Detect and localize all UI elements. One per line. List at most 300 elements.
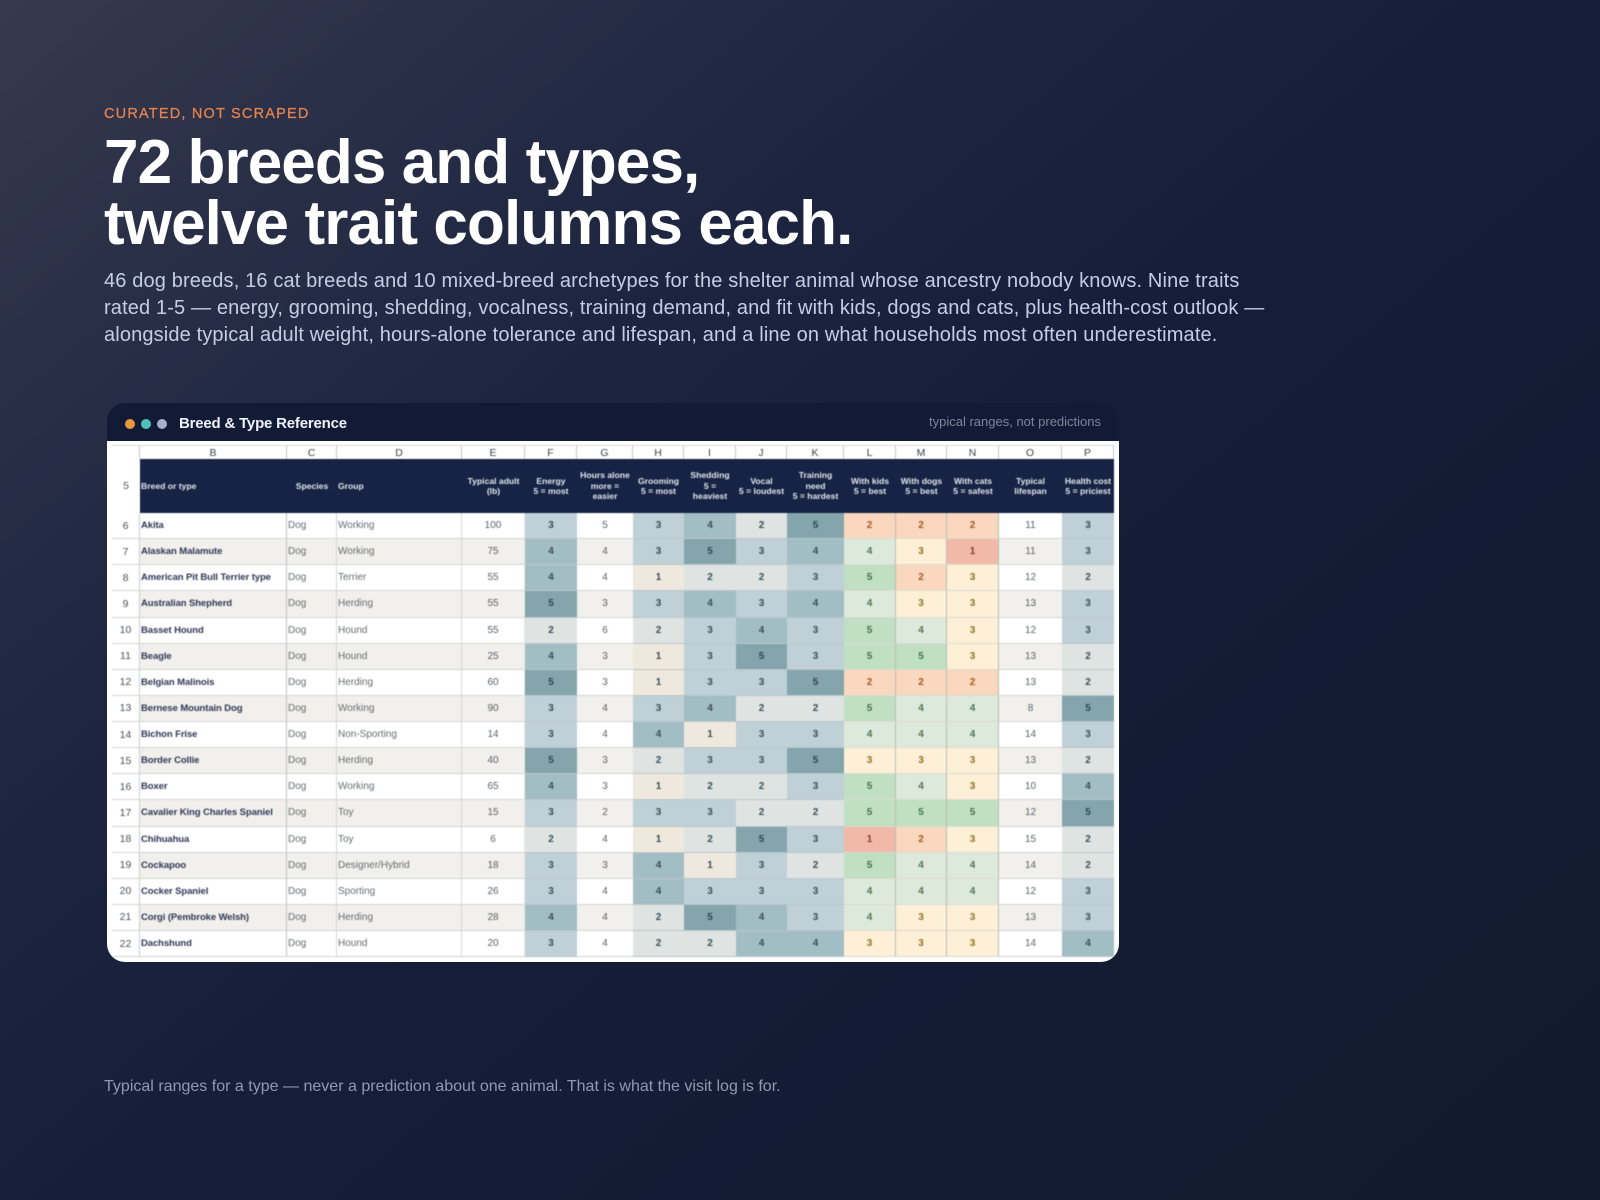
row: Cocker Spaniel: 3: [548, 886, 554, 897]
row: Basset Hound: 5: [867, 625, 872, 636]
header row: Typical adult: [468, 476, 519, 486]
row: Cavalier King Charles Spaniel: 5: [970, 807, 975, 818]
row: Belgian Malinois: Belgian Malinois: [141, 677, 214, 688]
footnote: Typical ranges for a type — never a prediction about one animal. That is what the visit log is for.: [104, 1078, 781, 1094]
row: Cockapoo: 14: [1025, 860, 1036, 871]
row: Australian Shepherd: 4: [867, 598, 872, 609]
row: Bichon Frise: 4: [918, 729, 924, 740]
row: Chihuahua: 15: [1025, 834, 1036, 845]
row: American Pit Bull Terrier type: 2: [1085, 572, 1091, 583]
header row: more =: [591, 481, 619, 491]
row: Dachshund: 3: [867, 938, 872, 949]
header row: Vocal: [750, 476, 773, 486]
row: Chihuahua: 3: [813, 834, 818, 845]
row: Chihuahua: 2: [548, 834, 554, 845]
row: Cocker Spaniel: 4: [867, 886, 872, 897]
row: Alaskan Malamute: 1: [970, 546, 975, 557]
row: Bichon Frise: 4: [867, 729, 872, 740]
row: Chihuahua: 2: [918, 834, 924, 845]
row: Bernese Mountain Dog: 5: [1085, 703, 1091, 714]
row: Dachshund: 20: [487, 938, 499, 949]
row: Belgian Malinois: [112, 669, 1114, 696]
row: Belgian Malinois: 1: [656, 677, 661, 688]
row: Bernese Mountain Dog: 90: [487, 703, 499, 714]
row: Cockapoo: 19: [120, 859, 131, 871]
header row: 5 = safest: [953, 486, 993, 496]
header row: Group: [338, 481, 364, 491]
row: Boxer: 10: [1025, 781, 1036, 792]
row: American Pit Bull Terrier type: 4: [548, 572, 554, 583]
row: Alaskan Malamute: [112, 538, 1114, 566]
row: Beagle: 3: [602, 651, 608, 662]
row: Belgian Malinois: 2: [1085, 677, 1091, 688]
row: Dachshund: 4: [759, 938, 764, 949]
row: Alaskan Malamute: 3: [759, 546, 764, 557]
row: Beagle: 5: [759, 651, 764, 662]
row: Dachshund: 4: [813, 938, 818, 949]
row: Cockapoo: 4: [970, 860, 975, 871]
row: Cocker Spaniel: 3: [1085, 886, 1091, 897]
row: Bichon Frise: 14: [487, 729, 499, 740]
row: Bichon Frise: 1: [707, 729, 713, 740]
row: Dachshund: Dachshund: [141, 938, 192, 949]
row: Akita: 3: [548, 520, 554, 531]
row: Cocker Spaniel: 3: [759, 886, 764, 897]
row: Akita: 2: [970, 520, 975, 531]
row: Australian Shepherd: 3: [656, 598, 661, 609]
row: Boxer: 5: [867, 781, 872, 792]
row: Beagle: [112, 643, 1114, 670]
row: Dachshund: [112, 930, 1114, 958]
row: Chihuahua: 4: [602, 834, 608, 845]
row: Australian Shepherd: 9: [123, 598, 128, 610]
row: Bernese Mountain Dog: 4: [707, 703, 713, 714]
row: Bernese Mountain Dog: 3: [656, 703, 661, 714]
title: [104, 128, 852, 258]
panel: spreadsheet window: [107, 403, 1119, 962]
row: Cockapoo: 18: [487, 860, 499, 871]
row: Chihuahua: [112, 826, 1114, 854]
row: Cockapoo: 2: [1085, 860, 1091, 871]
row: Cavalier King Charles Spaniel: 5: [918, 807, 924, 818]
row: Corgi (Pembroke Welsh): 13: [1025, 912, 1036, 923]
row: Cavalier King Charles Spaniel: Cavalier King Charles Spaniel: [141, 807, 273, 818]
row: Beagle: 3: [970, 651, 975, 662]
row: Border Collie: 2: [1085, 755, 1091, 766]
row: Chihuahua: 5: [759, 834, 764, 845]
row: Bernese Mountain Dog: 2: [813, 703, 818, 714]
row: American Pit Bull Terrier type: 8: [123, 572, 128, 584]
row: Border Collie: 3: [707, 755, 713, 766]
row: Beagle: 2: [1085, 651, 1091, 662]
row: Cocker Spaniel: 4: [970, 886, 975, 897]
row: Basset Hound: 3: [707, 625, 713, 636]
row: Akita: 100: [485, 520, 501, 531]
row: Corgi (Pembroke Welsh): 3: [970, 912, 975, 923]
row: Corgi (Pembroke Welsh): 3: [1085, 912, 1091, 923]
description text: alongside typical adult weight, hours-alone tolerance and lifespan, and a line on what households most often underestimate.: [104, 324, 1217, 346]
header row: Energy: [536, 476, 566, 486]
row: Dachshund: Dog: [288, 938, 306, 949]
row: Cavalier King Charles Spaniel: 2: [602, 807, 608, 818]
row: Akita: 6: [123, 520, 128, 532]
row: Akita: 11: [1025, 520, 1036, 531]
row: Basset Hound: 4: [759, 625, 764, 636]
row: Bichon Frise: 4: [656, 729, 661, 740]
row: Border Collie: 3: [970, 755, 975, 766]
row: Alaskan Malamute: 3: [656, 546, 661, 557]
header row: 5: [123, 480, 129, 492]
row: Dachshund: 2: [656, 938, 661, 949]
row: Boxer: [112, 774, 1114, 800]
row: Corgi (Pembroke Welsh): 4: [867, 912, 872, 923]
row: Chihuahua: 1: [867, 834, 872, 845]
header row: 5 = best: [905, 486, 938, 496]
row: Akita: 2: [759, 520, 764, 531]
row: Basset Hound: Basset Hound: [141, 625, 204, 636]
row: Akita: 2: [867, 520, 872, 531]
row: Basset Hound: 3: [1085, 625, 1091, 636]
row: Cockapoo: 3: [548, 860, 554, 871]
row: Akita: 2: [918, 520, 924, 531]
row: Akita: [112, 512, 1114, 540]
column letters: O: [1026, 446, 1034, 458]
row: Bernese Mountain Dog: Bernese Mountain Dog: [141, 703, 242, 714]
header row: 5 = most: [641, 486, 676, 496]
row: Cockapoo: 5: [867, 860, 872, 871]
row: Boxer: 4: [918, 781, 924, 792]
row: Alaskan Malamute: Alaskan Malamute: [141, 546, 222, 557]
row: Beagle: Dog: [288, 651, 306, 662]
header row: (lb): [487, 486, 500, 496]
title: 72 breeds and types,: [104, 128, 699, 197]
header row: lifespan: [1014, 486, 1047, 496]
eyebrow label: CURATED, NOT SCRAPED: [104, 106, 310, 122]
column letters: L: [867, 446, 872, 458]
row: American Pit Bull Terrier type: 1: [656, 572, 661, 583]
row: Border Collie: 2: [656, 755, 661, 766]
row: American Pit Bull Terrier type: 55: [487, 572, 499, 583]
row: Alaskan Malamute: 4: [602, 546, 608, 557]
description text: [104, 270, 1264, 346]
row: Cavalier King Charles Spaniel: 5: [1085, 807, 1091, 818]
row: Belgian Malinois: Dog: [288, 677, 306, 688]
header row: 5 = most: [533, 486, 569, 496]
row: Cocker Spaniel: 20: [120, 885, 131, 897]
row: Beagle: 4: [548, 651, 554, 662]
row: Dachshund: 14: [1025, 938, 1036, 949]
row: Basset Hound: 3: [970, 625, 975, 636]
row: Cockapoo: Designer/Hybrid: [338, 860, 410, 871]
row: Cockapoo: Dog: [288, 860, 306, 871]
row: American Pit Bull Terrier type: Terrier: [338, 572, 366, 583]
row: Bichon Frise: 4: [602, 729, 608, 740]
row: Boxer: 1: [656, 781, 661, 792]
row: Australian Shepherd: Herding: [338, 598, 373, 609]
row: Australian Shepherd: Australian Shepherd: [141, 598, 232, 609]
row: Bernese Mountain Dog: 3: [548, 703, 554, 714]
row: Boxer: Working: [338, 781, 374, 792]
row: Dachshund: 2: [707, 938, 713, 949]
row: Cocker Spaniel: Cocker Spaniel: [141, 886, 208, 897]
row: Corgi (Pembroke Welsh): Dog: [288, 912, 306, 923]
row: Bichon Frise: 14: [120, 729, 131, 741]
row: Boxer: 3: [602, 781, 608, 792]
row: Australian Shepherd: [112, 590, 1114, 618]
row: Bichon Frise: Non-Sporting: [338, 729, 397, 740]
row: Dachshund: Hound: [338, 938, 367, 949]
row: Dachshund: 4: [602, 938, 608, 949]
row: Australian Shepherd: 5: [548, 598, 554, 609]
row: Akita: Akita: [141, 520, 164, 531]
row: Cocker Spaniel: 4: [918, 886, 924, 897]
panel: spreadsheet: [107, 441, 1119, 962]
row: Corgi (Pembroke Welsh): 3: [918, 912, 924, 923]
row: Boxer: 4: [1085, 781, 1091, 792]
row: Cockapoo: [112, 852, 1114, 880]
row: Border Collie: 13: [1025, 755, 1036, 766]
window note: typical ranges, not predictions: [929, 414, 1101, 429]
icon: window dot teal: [141, 419, 151, 429]
row: Cockapoo: 2: [813, 860, 818, 871]
row: Bernese Mountain Dog: 13: [120, 702, 131, 714]
row: American Pit Bull Terrier type: 4: [602, 572, 608, 583]
row: Border Collie: 3: [759, 755, 764, 766]
row: Cavalier King Charles Spaniel: Dog: [288, 807, 306, 818]
row: Belgian Malinois: 5: [548, 677, 554, 688]
row: Beagle: 5: [918, 651, 924, 662]
row: Cavalier King Charles Spaniel: 15: [487, 807, 499, 818]
row: Border Collie: Herding: [338, 755, 373, 766]
row: Alaskan Malamute: 11: [1025, 546, 1036, 557]
row: Bernese Mountain Dog: 5: [867, 703, 872, 714]
column letters: N: [969, 446, 976, 458]
row: Cocker Spaniel: Sporting: [338, 886, 375, 897]
row: Australian Shepherd: 3: [970, 598, 975, 609]
column letters: G: [600, 446, 609, 458]
row: Dachshund: 4: [1085, 938, 1091, 949]
header row: need: [805, 481, 826, 491]
row: Cavalier King Charles Spaniel: [112, 799, 1115, 828]
row: Basset Hound: 6: [602, 625, 608, 636]
row: Australian Shepherd: 4: [707, 598, 713, 609]
header row: With kids: [851, 476, 889, 486]
row: Bichon Frise: 4: [970, 729, 975, 740]
row: Belgian Malinois: 3: [602, 677, 608, 688]
row: Beagle: Hound: [338, 651, 367, 662]
row: Border Collie: Border Collie: [141, 755, 199, 766]
row: Chihuahua: 6: [490, 834, 496, 845]
header row: With dogs: [901, 476, 942, 486]
row: American Pit Bull Terrier type: [112, 564, 1114, 592]
row: American Pit Bull Terrier type: 5: [867, 572, 872, 583]
row: Belgian Malinois: 12: [120, 676, 131, 688]
row: Basset Hound: Hound: [338, 625, 367, 636]
row: Beagle: 25: [487, 651, 499, 662]
row: Bernese Mountain Dog: 2: [759, 703, 764, 714]
row: Cocker Spaniel: 4: [656, 886, 661, 897]
row: Australian Shepherd: 3: [918, 598, 924, 609]
row: Border Collie: [112, 747, 1114, 774]
header row: Typical: [1016, 476, 1045, 486]
row: Alaskan Malamute: Dog: [288, 546, 306, 557]
row: Beagle: 11: [120, 650, 131, 662]
row: Akita: 5: [602, 520, 608, 531]
row: American Pit Bull Terrier type: 2: [918, 572, 924, 583]
column letters: M: [917, 446, 925, 458]
column letters: [112, 444, 1115, 958]
header row: Species: [296, 481, 328, 491]
header row: Health cost: [1065, 476, 1111, 486]
row: Cocker Spaniel: [112, 878, 1114, 906]
row: Cocker Spaniel: 3: [813, 886, 818, 897]
row: Belgian Malinois: Herding: [338, 677, 373, 688]
row: Cocker Spaniel: 4: [602, 886, 608, 897]
row: Bernese Mountain Dog: Dog: [288, 703, 306, 714]
row: Cockapoo: 4: [656, 860, 661, 871]
row: Bichon Frise: 3: [759, 729, 764, 740]
row: American Pit Bull Terrier type: 2: [759, 572, 764, 583]
row: Bernese Mountain Dog: 4: [602, 703, 608, 714]
row: American Pit Bull Terrier type: 12: [1025, 572, 1036, 583]
row: Akita: 5: [813, 520, 818, 531]
row: Corgi (Pembroke Welsh): 5: [707, 912, 713, 923]
description text: rated 1-5 — energy, grooming, shedding, vocalness, training demand, and fit with kids, dogs and cats, plus health-cost outlook —: [104, 296, 1264, 318]
row: Alaskan Malamute: 3: [918, 546, 924, 557]
row: Boxer: 2: [759, 781, 764, 792]
row: Alaskan Malamute: 7: [123, 546, 128, 558]
header row: Breed or type: [141, 481, 196, 491]
column letters: B: [209, 446, 216, 458]
row: Chihuahua: Dog: [288, 834, 306, 845]
row: Basset Hound: 55: [487, 625, 499, 636]
row: Border Collie: 3: [918, 755, 924, 766]
row: Chihuahua: 2: [707, 834, 713, 845]
row: Dachshund: 3: [970, 938, 975, 949]
column letters: I: [708, 446, 711, 458]
row: Bichon Frise: Bichon Frise: [141, 729, 197, 740]
row: Border Collie: 40: [487, 755, 499, 766]
row: Chihuahua: Toy: [338, 834, 354, 845]
header row: Training: [799, 470, 832, 480]
row: Corgi (Pembroke Welsh): Corgi (Pembroke Welsh): [141, 912, 249, 923]
row: Alaskan Malamute: 4: [867, 546, 872, 557]
row: Border Collie: 3: [602, 755, 608, 766]
row: Chihuahua: 1: [656, 834, 661, 845]
row: American Pit Bull Terrier type: 3: [970, 572, 975, 583]
header row: Hours alone: [580, 470, 630, 480]
header row: 5 = hardest: [793, 491, 838, 501]
row: American Pit Bull Terrier type: 3: [813, 572, 818, 583]
row: American Pit Bull Terrier type: American Pit Bull Terrier type: [141, 572, 271, 583]
row: American Pit Bull Terrier type: 2: [707, 572, 713, 583]
row: Belgian Malinois: 3: [707, 677, 713, 688]
row: Cavalier King Charles Spaniel: 2: [759, 807, 764, 818]
row: Cavalier King Charles Spaniel: Toy: [338, 807, 354, 818]
row: Border Collie: 3: [867, 755, 872, 766]
row: Dachshund: 3: [548, 938, 554, 949]
row: Basset Hound: 3: [813, 625, 818, 636]
header row: Shedding: [690, 470, 730, 480]
row: Boxer: 3: [813, 781, 818, 792]
row: Beagle: 3: [813, 651, 818, 662]
row: Corgi (Pembroke Welsh): 28: [487, 912, 499, 923]
row: Belgian Malinois: 2: [970, 677, 975, 688]
row: Bernese Mountain Dog: 4: [918, 703, 924, 714]
header row: 5 =: [704, 481, 716, 491]
row: Bernese Mountain Dog: 4: [970, 703, 975, 714]
row: Beagle: Beagle: [141, 651, 172, 662]
row: Belgian Malinois: 5: [813, 677, 818, 688]
row: Bernese Mountain Dog: Working: [338, 703, 374, 714]
header row: easier: [593, 491, 617, 501]
row: Akita: 4: [707, 520, 713, 531]
row: Chihuahua: 3: [970, 834, 975, 845]
row: Bichon Frise: 3: [1085, 729, 1091, 740]
row: Boxer: 3: [970, 781, 975, 792]
row: Boxer: Dog: [288, 781, 306, 792]
row: Cockapoo: 1: [707, 860, 713, 871]
row: Bichon Frise: 3: [548, 729, 554, 740]
row: Cavalier King Charles Spaniel: 3: [656, 807, 661, 818]
row: Corgi (Pembroke Welsh): [112, 904, 1114, 932]
row: Belgian Malinois: 13: [1025, 677, 1036, 688]
row: Bichon Frise: 14: [1025, 729, 1036, 740]
row: Basset Hound: 2: [548, 625, 554, 636]
row: Cocker Spaniel: Dog: [288, 886, 306, 897]
row: Basset Hound: 10: [120, 624, 131, 636]
column letters: P: [1084, 446, 1091, 458]
row: Basset Hound: 12: [1025, 625, 1036, 636]
header row: 5 = loudest: [739, 486, 784, 496]
description text: 46 dog breeds, 16 cat breeds and 10 mixed-breed archetypes for the shelter animal whose ancestry nobody knows. Nine traits: [104, 270, 1240, 292]
row: Corgi (Pembroke Welsh): 21: [120, 911, 131, 923]
header row: Grooming: [638, 476, 679, 486]
row: Boxer: Boxer: [141, 781, 167, 792]
row: Cavalier King Charles Spaniel: 3: [548, 807, 554, 818]
row: Corgi (Pembroke Welsh): Herding: [338, 912, 373, 923]
row: Alaskan Malamute: Working: [338, 546, 374, 557]
row: Boxer: 2: [707, 781, 713, 792]
row: Cockapoo: 4: [918, 860, 924, 871]
row: Belgian Malinois: 60: [487, 677, 499, 688]
row: Australian Shepherd: 55: [487, 598, 499, 609]
row: Basset Hound: [112, 618, 1114, 644]
column letters: H: [654, 446, 662, 458]
row: Corgi (Pembroke Welsh): 4: [602, 912, 608, 923]
row: Alaskan Malamute: 3: [1085, 546, 1091, 557]
icon: window dot orange: [125, 419, 135, 429]
row: Cavalier King Charles Spaniel: 12: [1025, 807, 1036, 818]
row: Corgi (Pembroke Welsh): 2: [656, 912, 661, 923]
row: Border Collie: Dog: [288, 755, 306, 766]
row: Basset Hound: 4: [918, 625, 924, 636]
title: twelve trait columns each.: [104, 188, 852, 258]
row: Boxer: 65: [487, 781, 499, 792]
row: Cockapoo: 3: [759, 860, 764, 871]
row: Cocker Spaniel: 12: [1025, 886, 1036, 897]
row: Cavalier King Charles Spaniel: 2: [813, 807, 818, 818]
row: Bernese Mountain Dog: 8: [1028, 703, 1033, 714]
row: Bichon Frise: Dog: [288, 729, 306, 740]
row: Akita: Working: [338, 520, 374, 531]
row: Bernese Mountain Dog: [112, 695, 1115, 722]
row: Chihuahua: Chihuahua: [141, 834, 189, 845]
row: Cocker Spaniel: 26: [487, 886, 499, 897]
column letters: K: [811, 446, 818, 458]
column letters: C: [308, 446, 315, 458]
row: Basset Hound: 2: [656, 625, 661, 636]
